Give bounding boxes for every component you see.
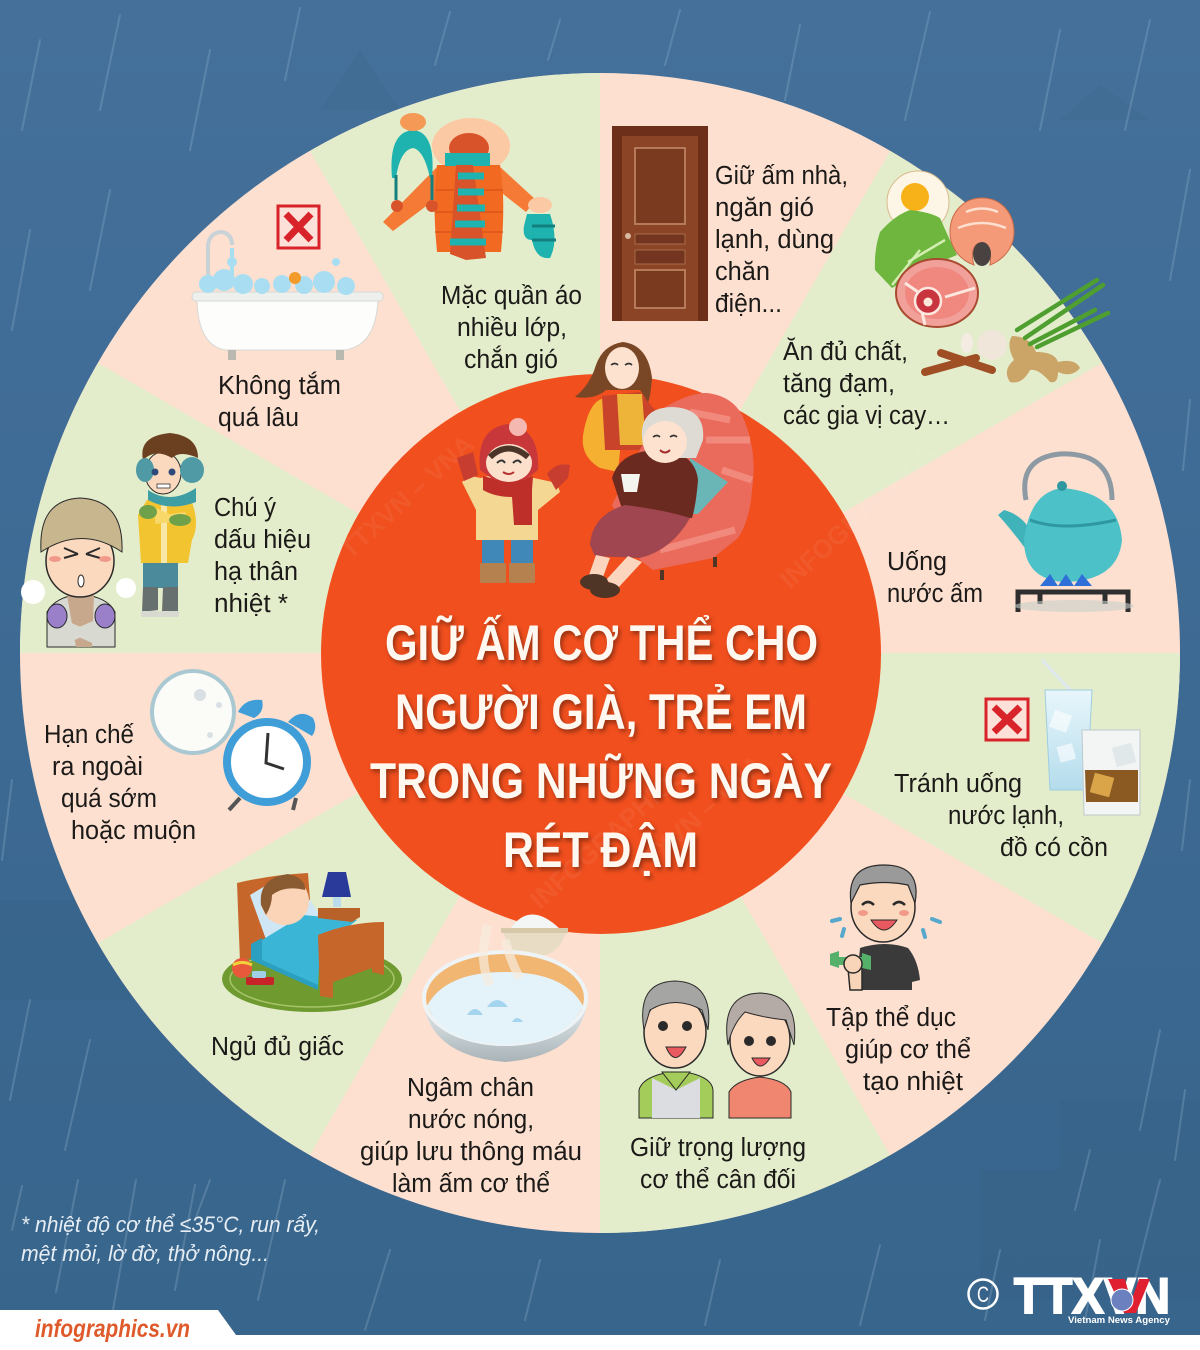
icon: elderly couple: [639, 981, 795, 1118]
label: limit going out: ra ngoài: [52, 753, 143, 781]
footnote: [21, 1212, 320, 1266]
label: bath: [218, 371, 341, 432]
label: foot bath: giúp lưu thông máu: [360, 1138, 582, 1166]
label: door: điện...: [715, 290, 782, 318]
icon: cold glass and whisky: [1042, 660, 1140, 815]
watermarks: INFOGRAPHICS: [774, 439, 942, 594]
footnote: mệt mỏi, lờ đờ, thở nông...: [21, 1241, 269, 1266]
centre circle: [321, 374, 881, 934]
label: foot bath: [360, 1074, 582, 1198]
title: NGƯỜI GIÀ, TRẺ EM: [395, 684, 807, 740]
watermarks: [334, 429, 942, 914]
footnote: * nhiệt độ cơ thể ≤35°C, run rẩy,: [21, 1212, 320, 1237]
label: hypothermia: hạ thân: [214, 558, 298, 586]
label: drinks: đồ có cồn: [1000, 834, 1108, 862]
label: bath: Không tắm: [218, 371, 341, 400]
watermarks: TTXVN – VNA: [334, 429, 480, 564]
icon: wooden door: [612, 126, 708, 321]
label: weight: cơ thể cân đối: [640, 1166, 796, 1194]
label: door: Giữ ấm nhà,: [715, 162, 848, 190]
label: clothes: Mặc quần áo: [441, 282, 582, 310]
title: [370, 614, 832, 878]
label: food: tăng đạm,: [783, 370, 895, 398]
icon: moon and alarm clock: [152, 671, 315, 810]
label: drinks: nước lạnh,: [948, 802, 1064, 830]
label: exercise: [826, 1004, 971, 1096]
footer strip with site name: [0, 1310, 1200, 1350]
label: foot bath: làm ấm cơ thể: [392, 1170, 550, 1198]
label: clothes: [441, 282, 582, 374]
icon: child sleeping in bed: [222, 872, 402, 1012]
label: drinks: [894, 770, 1108, 862]
label: sleep: Ngủ đủ giấc: [211, 1033, 344, 1061]
label: warm water: Uống: [887, 548, 947, 576]
label: exercise: tạo nhiệt: [863, 1068, 963, 1096]
label: limit going out: Hạn chế: [44, 721, 134, 749]
label: clothes: nhiều lớp,: [457, 314, 567, 342]
label: door: ngăn gió: [715, 194, 814, 222]
label: weight: [630, 1134, 806, 1194]
footer strip with site name: infographics.vn: [35, 1315, 190, 1343]
label: limit going out: quá sớm: [61, 785, 157, 813]
icon: forbidden mark (drinks): [986, 699, 1028, 740]
label: door: chăn: [715, 258, 770, 286]
icon: kettle on stove: [998, 454, 1134, 612]
icon: foot bath bowl: [422, 914, 588, 1062]
logo: TTXVN: Vietnam News Agency: [1068, 1315, 1171, 1326]
label: exercise: giúp cơ thể: [845, 1036, 971, 1064]
icon: forbidden mark (bath): [278, 206, 319, 248]
label: foot bath: Ngâm chân: [407, 1074, 534, 1102]
label: drinks: Tránh uống: [894, 770, 1022, 798]
label: limit going out: [44, 721, 196, 845]
icon: shivering old man and boy: [21, 433, 204, 647]
watermarks: TTXVN – VNA: [624, 749, 770, 884]
label: warm water: nước ấm: [887, 580, 983, 608]
label: hypothermia: dấu hiệu: [214, 526, 311, 554]
title: TRONG NHỮNG NGÀY: [370, 752, 832, 809]
icon: food ingredients: [875, 171, 1108, 382]
label: warm water: [887, 548, 983, 608]
label: door: [715, 162, 848, 318]
label: food: Ăn đủ chất,: [783, 337, 908, 366]
label: exercise: Tập thể dục: [826, 1004, 956, 1032]
logo: TTXVN: TTXVN: [1014, 1268, 1170, 1324]
label: weight: Giữ trọng lượng: [630, 1134, 806, 1162]
label: foot bath: nước nóng,: [408, 1106, 534, 1134]
label: clothes: chắn gió: [464, 345, 558, 374]
label: food: các gia vị cay…: [783, 402, 950, 430]
label: bath: quá lâu: [218, 404, 299, 432]
illustration: child in winter clothes: [457, 418, 570, 583]
illustration: woman and grandmother on armchair: [575, 342, 754, 598]
label: hypothermia: [214, 494, 311, 618]
label: hypothermia: Chú ý: [214, 494, 276, 522]
logo: TTXVN: C: [977, 1282, 989, 1307]
title: RÉT ĐẬM: [503, 822, 698, 878]
icon: winter coat, hat and mitten: [383, 113, 556, 260]
label: limit going out: hoặc muộn: [71, 817, 196, 845]
label: hypothermia: nhiệt *: [214, 590, 288, 618]
icon: bathtub with bubbles: [192, 232, 383, 360]
label: door: lạnh, dùng: [715, 226, 834, 254]
icon: old man exercising: [830, 865, 940, 990]
title: GIỮ ẤM CƠ THỂ CHO: [385, 614, 818, 671]
label: food: [783, 337, 950, 430]
watermarks: INFOGRAPHICS: [524, 759, 692, 914]
